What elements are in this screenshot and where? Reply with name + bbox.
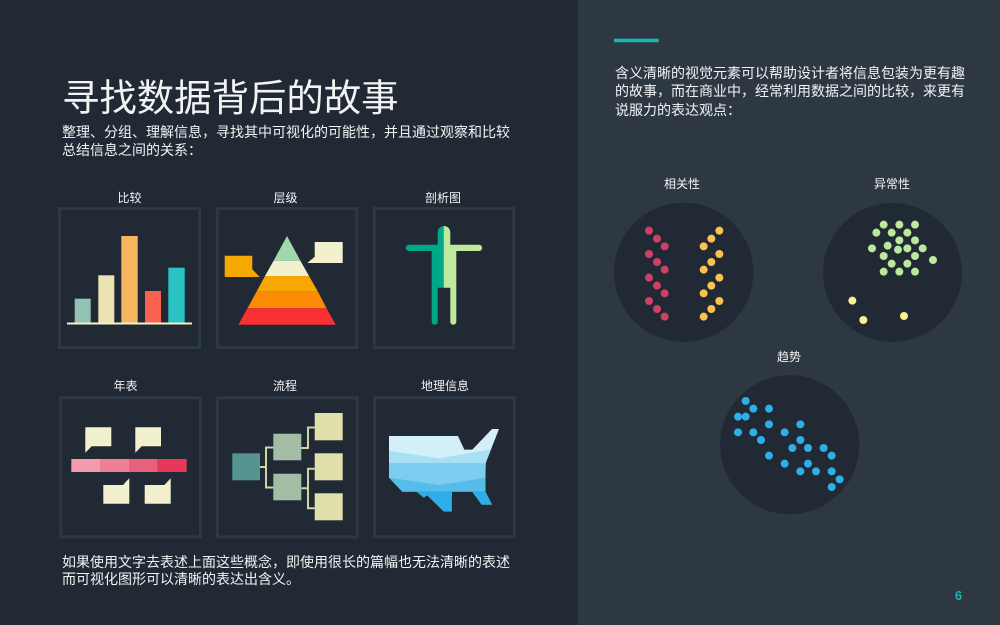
flow diagram — [232, 413, 343, 520]
panel: comparison — [60, 189, 200, 348]
left background panel — [0, 0, 578, 625]
label: trend: 趋势 — [777, 348, 801, 365]
panel: anomaly — [823, 175, 962, 342]
right background panel — [578, 0, 1000, 625]
label: anatomy: 剖析图 — [425, 189, 461, 206]
callout: left — [225, 256, 260, 277]
panel: timeline — [61, 377, 200, 537]
icon: human figure — [406, 226, 482, 325]
intro text: 总结信息之间的关系： — [62, 140, 202, 160]
title: 寻找数据背后的故事 — [62, 68, 399, 122]
closing text: 而可视化图形可以清晰的表达出含义。 — [62, 569, 300, 589]
label: geography: 地理信息 — [421, 377, 469, 394]
dots: anomaly — [848, 221, 937, 324]
label: hierarchy: 层级 — [273, 189, 298, 206]
pyramid — [238, 236, 336, 325]
label: correlation: 相关性 — [664, 175, 700, 192]
panel: anatomy — [374, 189, 514, 348]
timeline bar — [71, 459, 187, 472]
panel: trend — [720, 348, 859, 514]
page number: 6 — [955, 588, 962, 603]
intro text: 整理、分组、理解信息，寻找其中可视化的可能性，并且通过观察和比较 — [62, 122, 510, 142]
panel: hierarchy — [217, 189, 357, 348]
panel: correlation — [614, 175, 753, 342]
callouts — [85, 427, 171, 504]
label: process: 流程 — [273, 377, 297, 394]
right intro text: 说服力的表达观点： — [615, 100, 741, 120]
panel: process — [218, 377, 357, 537]
panel: geography — [374, 377, 514, 537]
label: timeline: 年表 — [113, 377, 138, 394]
right intro text: 含义清晰的视觉元素可以帮助设计者将信息包装为更有趣 — [615, 63, 965, 83]
map: USA — [389, 429, 499, 512]
label: anomaly: 异常性 — [874, 175, 910, 192]
closing text: 如果使用文字去表述上面这些概念，即使用很长的篇幅也无法清晰的表述 — [62, 552, 510, 572]
dots: trend — [734, 397, 844, 491]
bar chart — [67, 236, 192, 324]
dots: correlation — [645, 227, 723, 321]
right intro text: 的故事，而在商业中，经常利用数据之间的比较，来更有 — [615, 81, 965, 101]
label: comparison: 比较 — [117, 189, 142, 206]
callout: right — [307, 242, 343, 263]
accent bar — [614, 39, 659, 42]
